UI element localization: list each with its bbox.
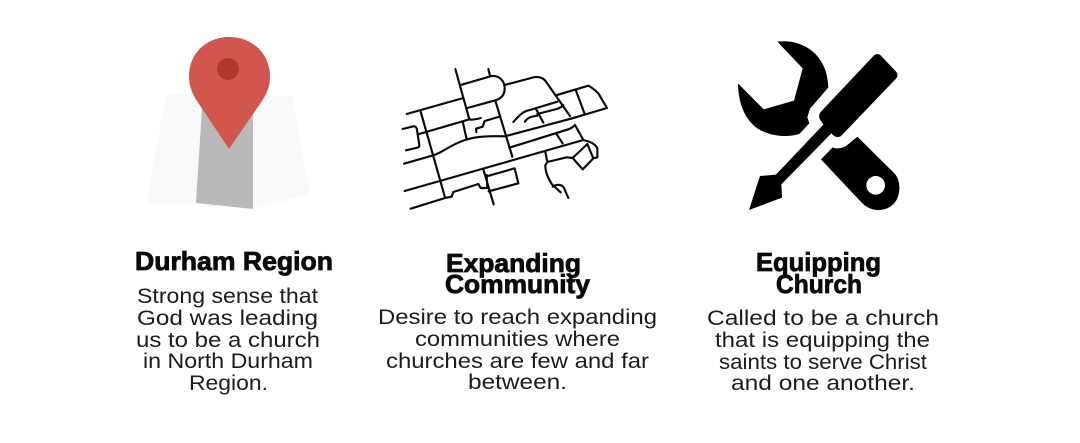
heading: Equipping Church: Church <box>776 269 862 299</box>
text block: Equipping Church description <box>707 306 939 395</box>
text block: Durham Region description: Region. <box>189 371 268 395</box>
text block: Equipping Church description: saints to serve Christ <box>719 350 927 374</box>
icon: street map <box>403 69 607 209</box>
text block: Durham Region description: Strong sense that <box>137 284 318 308</box>
icon: crossed wrench and screwdriver <box>738 41 899 210</box>
text block: Expanding Community description <box>378 305 657 394</box>
heading: Expanding Community: Expanding <box>446 248 581 278</box>
text block: Equipping Church description: and one another. <box>731 371 915 395</box>
heading: Expanding Community <box>445 248 591 299</box>
text block: Equipping Church description: Called to be a church <box>707 306 939 330</box>
panel: Expanding Community <box>378 69 657 394</box>
text block: Expanding Community description: churches are few and far <box>386 349 649 373</box>
text block: Durham Region description: God was leading <box>137 306 318 330</box>
heading: Expanding Community: Community <box>445 269 591 299</box>
text block: Expanding Community description: between. <box>468 370 567 394</box>
text block: Durham Region description: us to be a church <box>136 328 320 352</box>
heading: Equipping Church: Equipping <box>756 247 881 277</box>
text block: Equipping Church description: that is equipping the <box>715 328 930 352</box>
heading: Equipping Church <box>756 247 881 299</box>
panel: Durham Region <box>135 37 333 395</box>
heading: Durham Region: Durham Region <box>135 246 333 276</box>
icon: map with location pin <box>146 37 310 209</box>
panel: Equipping Church <box>707 41 939 395</box>
text block: Expanding Community description: communities where <box>415 327 620 351</box>
screwdriver <box>749 54 897 210</box>
text block: Expanding Community description: Desire to reach expanding <box>378 305 657 329</box>
text block: Durham Region description: in North Durham <box>143 349 313 373</box>
text block: Durham Region description <box>136 284 320 395</box>
wrench head <box>738 41 828 136</box>
wrench handle <box>821 137 899 210</box>
